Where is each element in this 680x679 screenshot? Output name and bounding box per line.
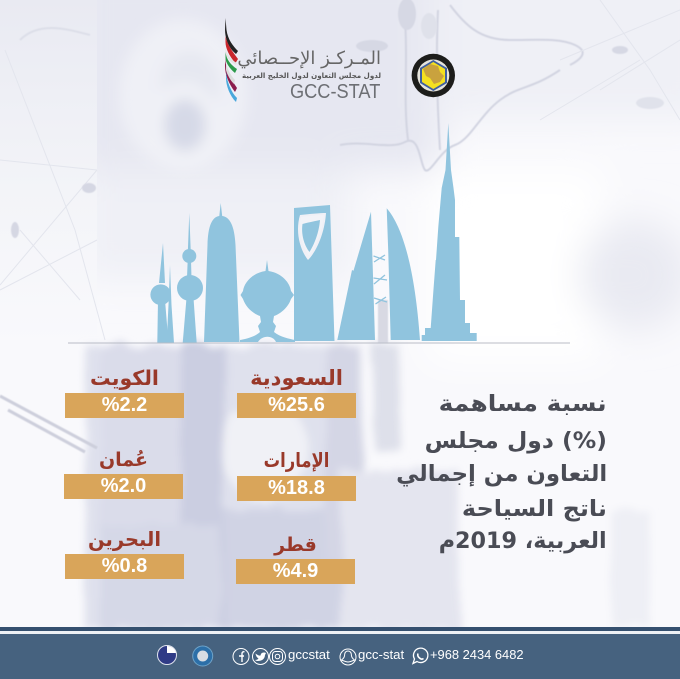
title text block: ناتج السياحة (462, 496, 607, 522)
blotches (11, 0, 664, 343)
icon: snapchat (340, 649, 356, 665)
panel: UAE (237, 448, 356, 501)
Burj Khalifa (422, 123, 477, 341)
panel: Saudi Arabia: السعودية (250, 366, 343, 390)
panel: Qatar: قطر (274, 534, 317, 556)
logo: GCC-STAT wordmark: GCC-STAT (290, 81, 380, 103)
footer contact: gccstat handle: gccstat (288, 647, 330, 662)
panel: Bahrain: %0.8 (102, 555, 147, 577)
circular brush rings (119, 19, 247, 171)
panel: Qatar: %4.9 (273, 560, 318, 582)
lower brush area (85, 345, 650, 630)
logo: Arabic name: المـركـز الإحــصائي (237, 48, 381, 69)
panel: Oman: %2.0 (101, 475, 146, 497)
panel: Oman: عُمان (99, 449, 148, 471)
panel: Qatar (236, 534, 355, 584)
Saudi Kingdom tower (294, 205, 334, 341)
icon: whatsapp (413, 648, 428, 664)
panel: Oman (64, 449, 183, 499)
Oman burner (240, 260, 295, 342)
soft tone regions (0, 0, 97, 345)
panel: UAE: %18.8 (268, 477, 325, 499)
panel: UAE: الإمارات (264, 448, 329, 472)
icon: certification badge one (158, 646, 176, 664)
panel: Bahrain: البحرين (88, 528, 161, 551)
Qatar tower (204, 203, 240, 342)
icon: facebook (233, 648, 249, 664)
panel: Saudi Arabia (237, 366, 356, 418)
panel: Kuwait: %2.2 (102, 394, 147, 416)
footer band (0, 627, 680, 679)
footer contact: phone: +968 2434 6482 (430, 647, 524, 662)
Bahrain WTC (337, 208, 420, 340)
title text block: (%) دول مجلس (425, 428, 607, 454)
panel: Bahrain (65, 528, 184, 579)
panel: Kuwait (65, 366, 184, 418)
icon: twitter (252, 648, 268, 664)
logo: Arabic subtitle: لدول مجلس التعاون لدول الخليج العربية (242, 71, 381, 80)
Kuwait towers (150, 213, 203, 343)
panel: Saudi Arabia: %25.6 (268, 394, 325, 416)
icon: instagram (270, 648, 286, 664)
title text block: العربية، 2019م (439, 528, 607, 554)
title text block: التعاون من إجمالي (396, 461, 607, 487)
map veins (0, 5, 583, 452)
panel: Kuwait: الكويت (90, 366, 159, 390)
title text block (396, 391, 607, 554)
icon: TUV badge (193, 646, 213, 666)
footer contact: gcc-stat handle: gcc-stat (358, 647, 404, 662)
title text block: نسبة مساهمة (439, 391, 607, 417)
